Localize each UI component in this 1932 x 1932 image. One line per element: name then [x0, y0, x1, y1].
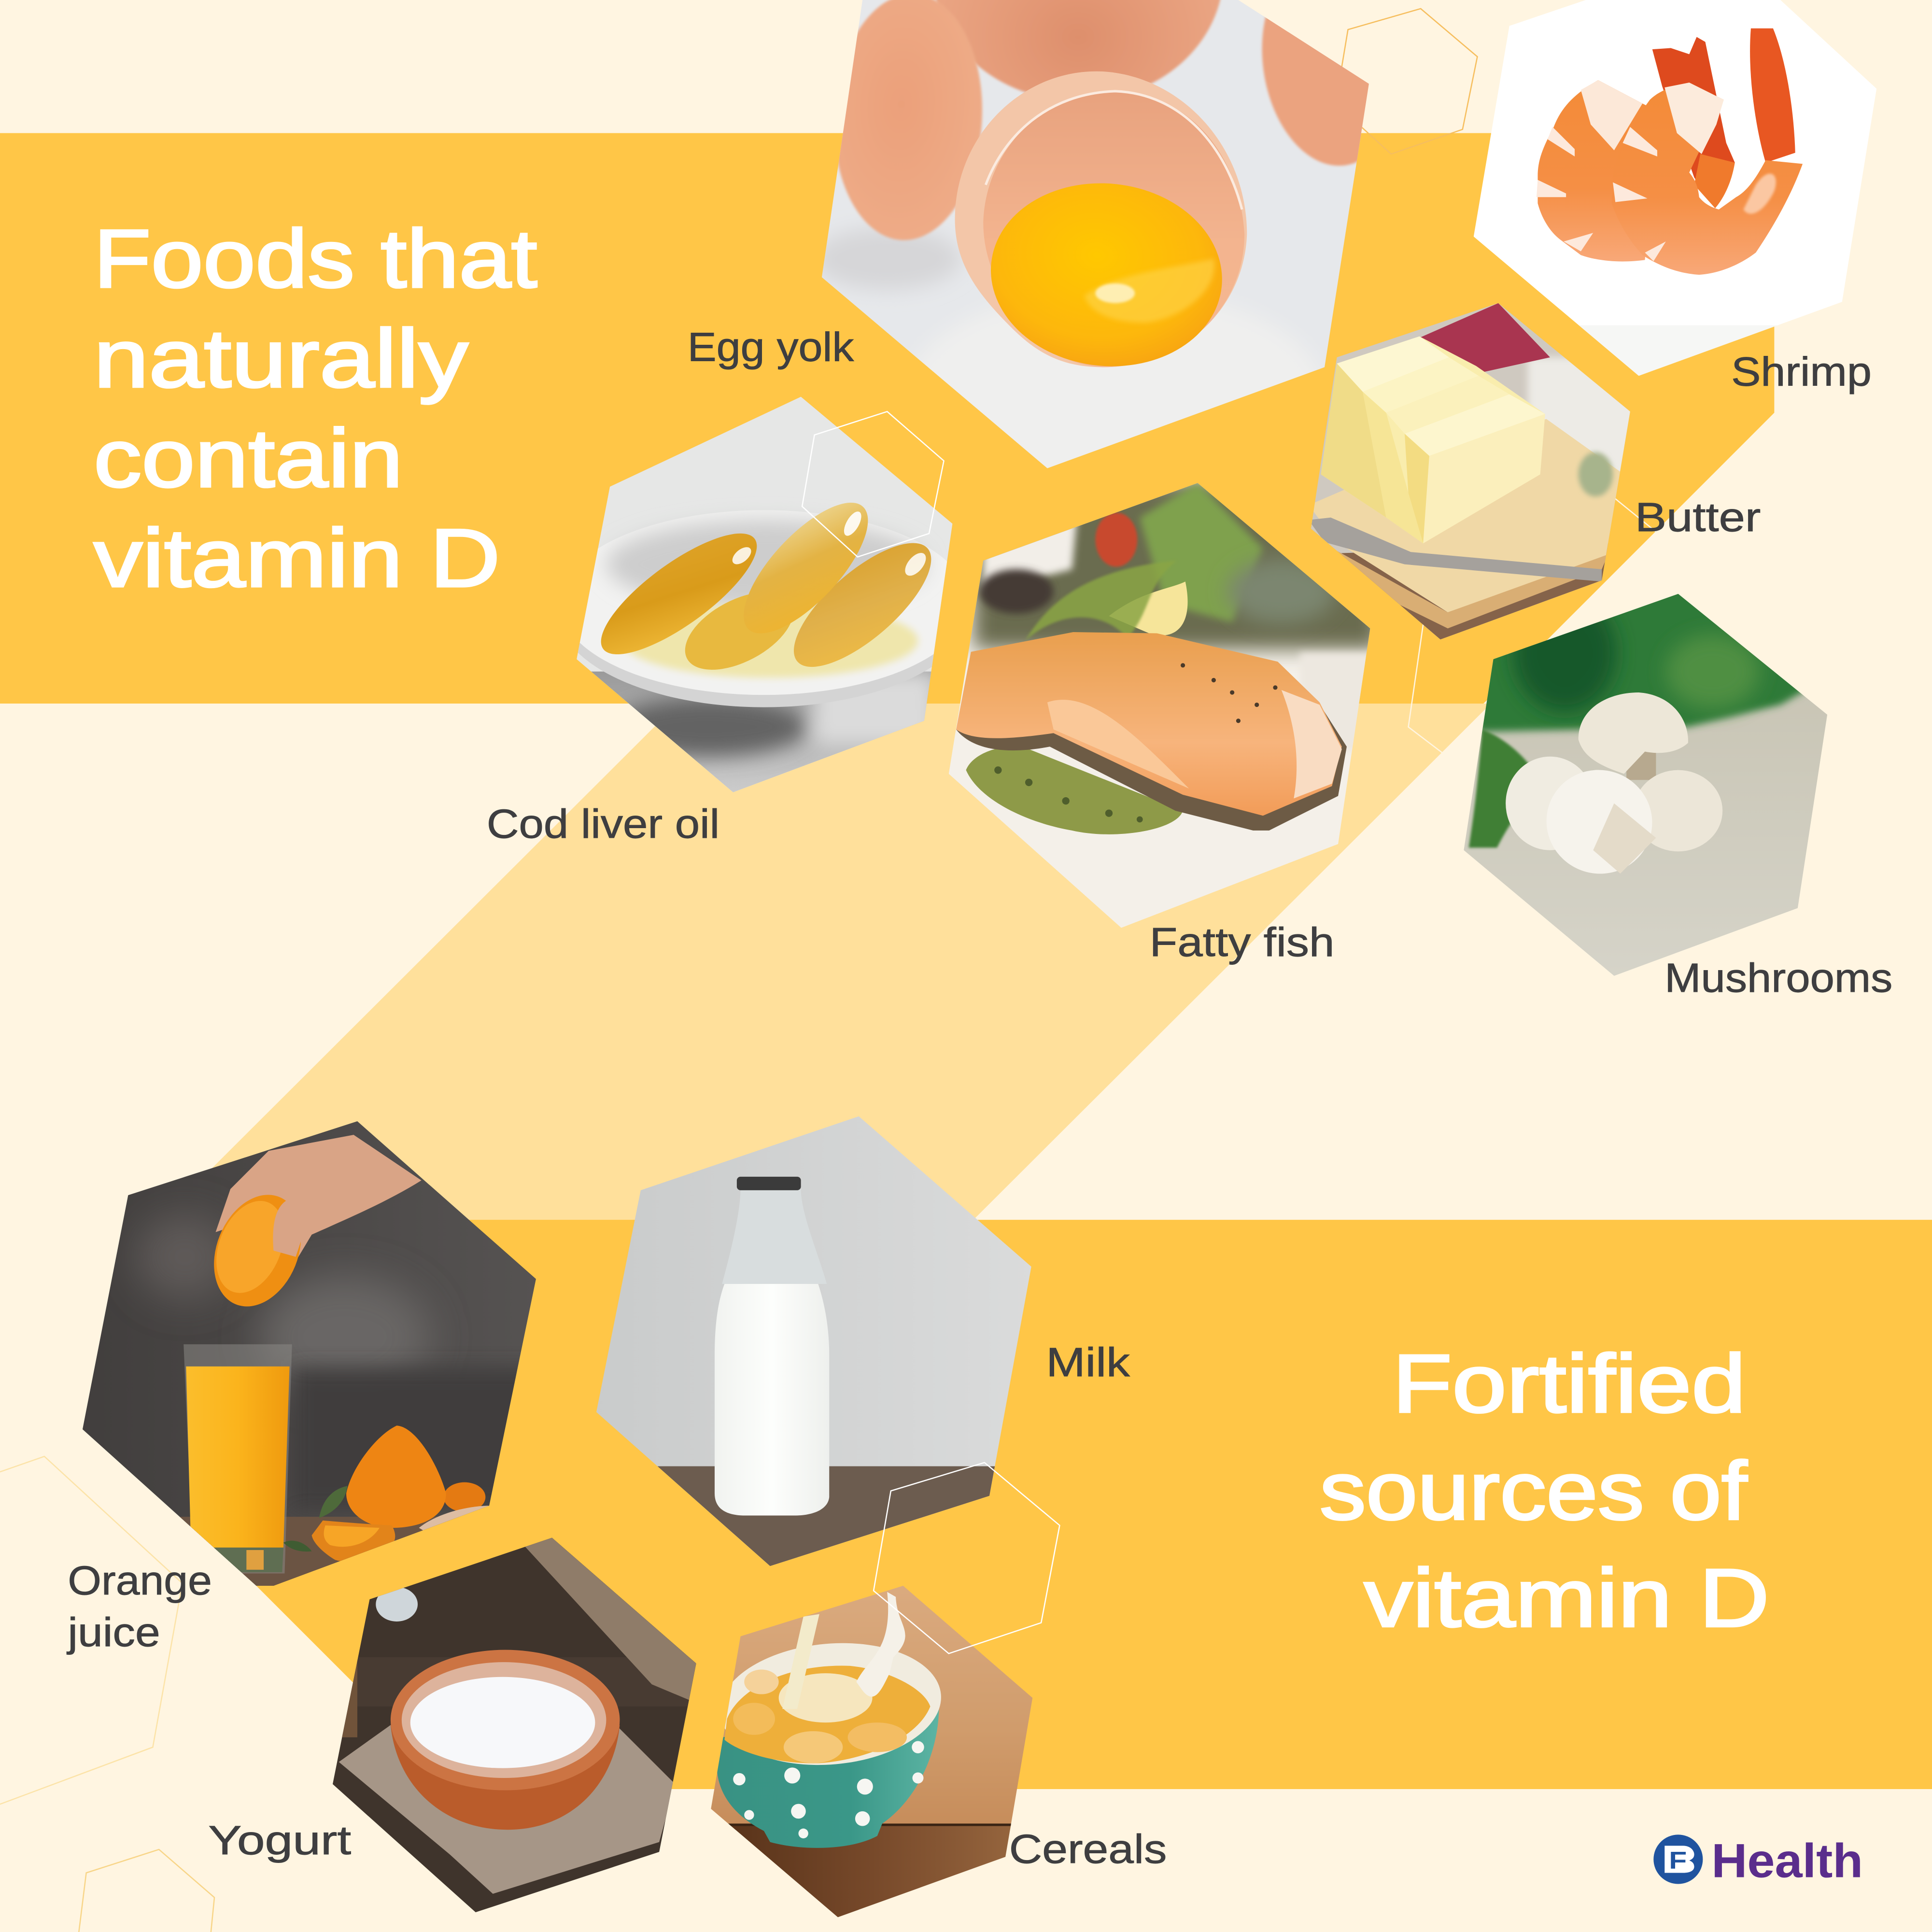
logo: Bajaj Finserv Health: [1653, 1834, 1863, 1888]
title: fortified sources of vitamin D: vitamin D: [1364, 1552, 1769, 1644]
photo: milk: [592, 1109, 1035, 1571]
mushroom caps: [1506, 692, 1722, 888]
wooden scoop: [419, 1506, 491, 1532]
label: egg yolk: Egg yolk: [688, 324, 854, 370]
right shrimp tail: [1750, 28, 1795, 163]
milk bottle: [715, 1177, 829, 1516]
label: fatty fish: Fatty fish: [1150, 919, 1334, 965]
outline hexagon: over cod liver oil: [802, 411, 944, 557]
back shrimp tail and body: [1652, 37, 1735, 208]
dill: [1025, 561, 1177, 641]
left shrimp: [1537, 80, 1657, 261]
salmon fillet: [956, 632, 1347, 831]
milk stream: [782, 1614, 819, 1709]
label: milk: Milk: [1046, 1340, 1130, 1385]
milk splash: [856, 1592, 905, 1697]
photo: egg yolk: [822, 0, 1369, 468]
whole orange: [346, 1425, 446, 1528]
label: orange juice: Orange: [68, 1558, 212, 1603]
title: foods that naturally contain vitamin D: vitamin D: [94, 512, 500, 605]
pesto: [966, 746, 1183, 834]
label: orange juice: [66, 1558, 212, 1655]
photo: orange juice: [74, 1115, 542, 1591]
logo icon: [1653, 1834, 1703, 1884]
plate: [557, 510, 971, 707]
bottom yellow banner: [256, 1220, 1932, 1789]
title: fortified sources of vitamin D: sources of: [1320, 1445, 1748, 1537]
outline hexagon: top orange: [1336, 9, 1477, 154]
glass of juice: [183, 1344, 292, 1573]
logo wordmark: Health: [1711, 1834, 1863, 1888]
lemon: [1109, 581, 1188, 635]
outline hexagon: over milk and cereals: [874, 1463, 1059, 1653]
top yellow banner: [0, 133, 1774, 704]
label: cereals: Cereals: [1009, 1826, 1167, 1872]
title: foods that naturally contain vitamin D: naturally: [94, 312, 468, 405]
title: foods that naturally contain vitamin D: [94, 213, 537, 605]
photo: mushrooms: [1441, 567, 1848, 981]
label: cod liver oil: Cod liver oil: [487, 801, 719, 846]
label: yogurt: Yogurt: [208, 1818, 351, 1863]
photo: cod liver oil: [557, 392, 971, 801]
title: fortified sources of vitamin D: Fortified: [1392, 1338, 1746, 1430]
logo icon: F: [1669, 1847, 1687, 1874]
clay bowl: [391, 1650, 620, 1830]
diagonal connecting band: [123, 704, 1491, 1355]
photo: cereals: [702, 1577, 1041, 1923]
label: butter: Butter: [1635, 494, 1761, 540]
outline hexagon: bottom left: [74, 1849, 214, 1932]
title: foods that naturally contain vitamin D: contain: [94, 412, 403, 505]
label: mushrooms: Mushrooms: [1664, 955, 1892, 1001]
teal bowl: [715, 1634, 946, 1848]
right shrimp body: [1612, 83, 1803, 275]
orange slice: [312, 1521, 395, 1562]
label: shrimp: Shrimp: [1731, 349, 1872, 395]
squeezed orange: [198, 1182, 317, 1320]
parsley: [1469, 730, 1540, 848]
title: foods that naturally contain vitamin D: Foods that: [94, 213, 537, 305]
oil capsules: [585, 484, 949, 687]
photo: shrimp: [1466, 0, 1885, 387]
outline hexagon: behind mushrooms: [1409, 498, 1745, 813]
shell crack line: [986, 91, 1242, 210]
label: orange juice: juice: [66, 1609, 160, 1655]
photo: butter: [1306, 296, 1639, 653]
leaves: [319, 1486, 348, 1518]
outline hexagon: lower left: [0, 1456, 183, 1809]
small orange: [444, 1482, 485, 1512]
hand: [216, 1135, 422, 1259]
photo: yogurt: [326, 1534, 702, 1916]
photo: fatty fish: [943, 478, 1380, 934]
title: fortified sources of vitamin D: [1320, 1338, 1769, 1644]
